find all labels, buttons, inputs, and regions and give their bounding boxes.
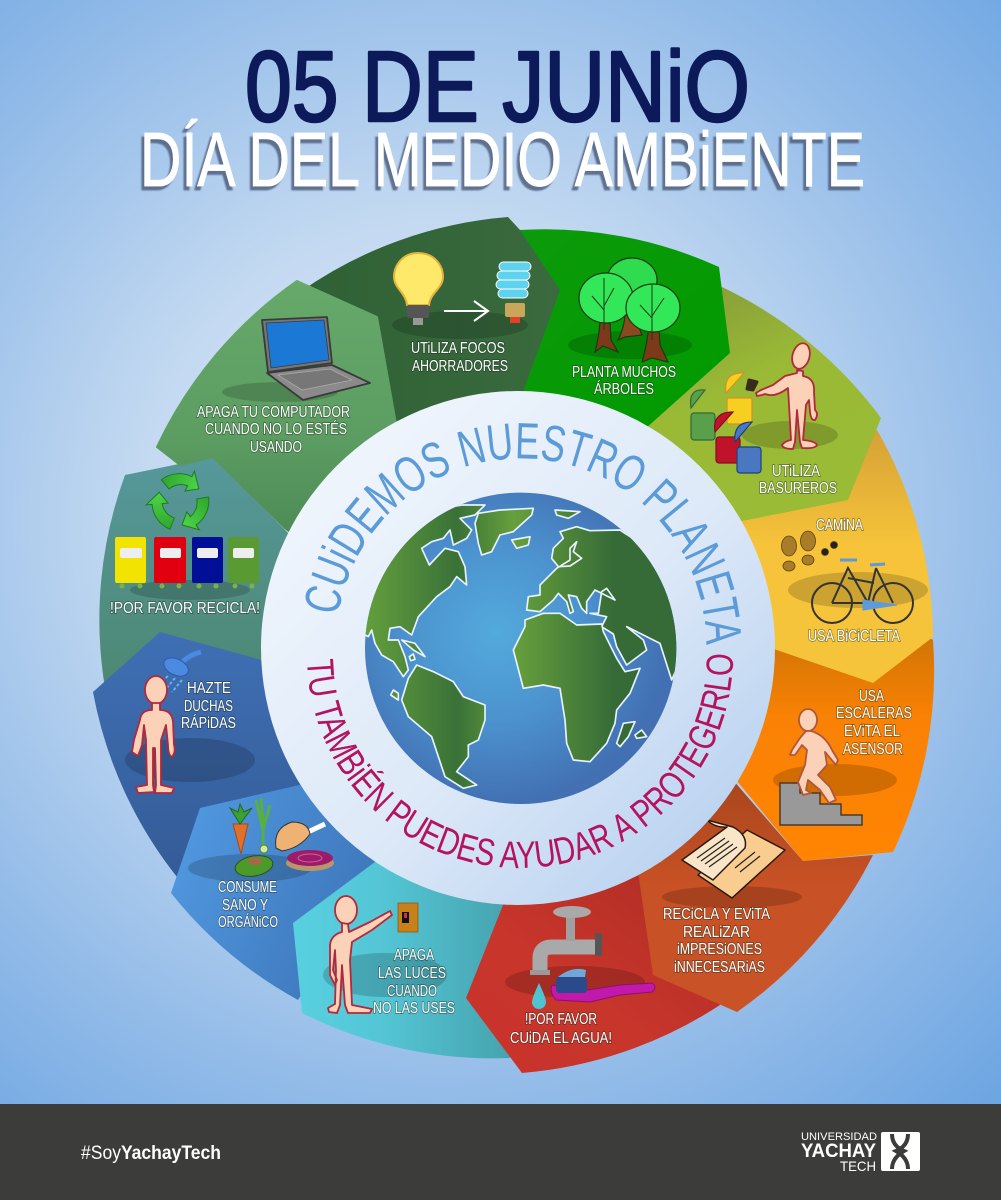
panel: food [171, 783, 390, 1000]
label: CONSUME [218, 879, 277, 896]
islands [617, 722, 635, 747]
footer bar [0, 1104, 1001, 1200]
label: !POR FAVOR RECICLA! [110, 600, 260, 617]
icon: carrot [230, 804, 252, 854]
curved heading: tu tambien puedes ayudar a protegerlo: TU TAMBiÉN PUEDES AYUDAR A PROTEGERLO [307, 654, 734, 868]
icon: person pointing [328, 896, 392, 1013]
logo: university: TECH [840, 1158, 876, 1174]
africa [513, 613, 640, 762]
label: iMPRESiONES [677, 941, 762, 958]
label [572, 364, 676, 398]
label [510, 1011, 612, 1047]
iceland [512, 537, 530, 548]
panel: recycle [99, 457, 300, 688]
icon: shower head [156, 652, 201, 692]
label: ORGÁNiCO [218, 912, 278, 931]
icon: incandescent bulb [394, 253, 443, 325]
icon: bicycle [812, 560, 913, 623]
label: AHORRADORES [412, 358, 508, 375]
panel: stairs [732, 620, 934, 861]
label [181, 680, 236, 732]
label: EViTA EL [844, 723, 900, 740]
hashtag: #SoyYachayTech [81, 1143, 221, 1164]
label: BASUREROS [759, 480, 837, 497]
greenland [475, 508, 533, 555]
south america [402, 665, 485, 788]
label [836, 688, 912, 758]
label: CAMiNA [816, 517, 863, 534]
panel: paper [637, 780, 873, 1012]
label: ESCALERAS [836, 705, 912, 722]
panel: laptop [157, 281, 396, 540]
label: ASENSOR [843, 741, 903, 758]
label: USANDO [250, 439, 302, 456]
icon: paper sheets [682, 820, 785, 898]
panel: lights off [293, 856, 510, 1058]
icon: green onion [256, 798, 270, 853]
label [663, 906, 770, 976]
north america [357, 505, 485, 677]
label: APAGA TU COMPUTADOR [197, 404, 350, 421]
icon: recycle arrows [132, 463, 223, 555]
icon: recycling bins [115, 537, 259, 588]
label: RECiCLA Y EViTA [663, 906, 770, 923]
label: ÁRBOLES [594, 379, 654, 398]
panel: trees [505, 225, 730, 429]
icon: arrow [444, 301, 488, 321]
label: APAGA [394, 947, 434, 964]
label [197, 404, 350, 456]
icon: chicken leg [276, 822, 325, 851]
eurasia [527, 527, 687, 680]
label: SANO Y [222, 897, 268, 914]
label [218, 879, 278, 931]
icon: toothbrush [551, 969, 655, 1002]
logo: university: YACHAY [801, 1141, 876, 1162]
label: USA [859, 688, 884, 705]
panel: shower [93, 632, 320, 900]
label: UTiLIZA [772, 463, 820, 480]
label: !POR FAVOR [525, 1011, 597, 1028]
panel: walk and bike [740, 430, 933, 683]
label: USA BiCiCLETA [808, 628, 900, 645]
icon: steak [286, 850, 334, 871]
panel: light bulbs [300, 217, 560, 430]
icon: avocado [234, 853, 274, 879]
label: UTiLIZA FOCOS [411, 340, 505, 357]
label: CUiDA EL AGUA! [510, 1030, 612, 1047]
logo: university: UNIVERSIDAD [801, 1131, 877, 1143]
label: iNNECESARiAS [674, 959, 765, 976]
label: RÁPiDAS [181, 713, 236, 732]
title: date: 05 DE JUNiO [245, 31, 750, 143]
icon: waste bins [691, 373, 761, 473]
icon: energy-saving bulb [496, 262, 531, 323]
icon: water drop [532, 983, 546, 1009]
icon: three trees [579, 258, 680, 362]
icon: footprints [782, 531, 838, 571]
icon: staircase [780, 783, 862, 825]
label: HAZTE [187, 680, 231, 697]
globe [357, 493, 687, 804]
icon: faucet [530, 906, 602, 975]
central disc [261, 391, 775, 905]
label: DUCHAS [184, 698, 233, 715]
label: PLANTA MUCHOS [572, 364, 676, 381]
panel: water [466, 860, 760, 1073]
icon: person showering [132, 676, 175, 793]
label: CUANDO [387, 983, 437, 1000]
logo: university [801, 1131, 920, 1174]
label [759, 463, 837, 497]
icon: person [756, 341, 817, 449]
label: REALiZAR [683, 924, 750, 941]
label: LAS LUCES [378, 965, 446, 982]
label: NO LAS USES [373, 1000, 455, 1017]
curved heading: cuidemos nuestro planeta: CUiDEMOS NUESTRO PLANETA [306, 423, 741, 645]
panel: trash bins [640, 287, 881, 522]
label: CUANDO NO LO ESTÉS [205, 419, 347, 438]
icon: person climbing [790, 709, 838, 803]
icon: light switch [398, 903, 418, 932]
icon: laptop [262, 317, 370, 400]
svalbard [555, 510, 580, 518]
label [373, 947, 455, 1017]
label [411, 340, 508, 375]
